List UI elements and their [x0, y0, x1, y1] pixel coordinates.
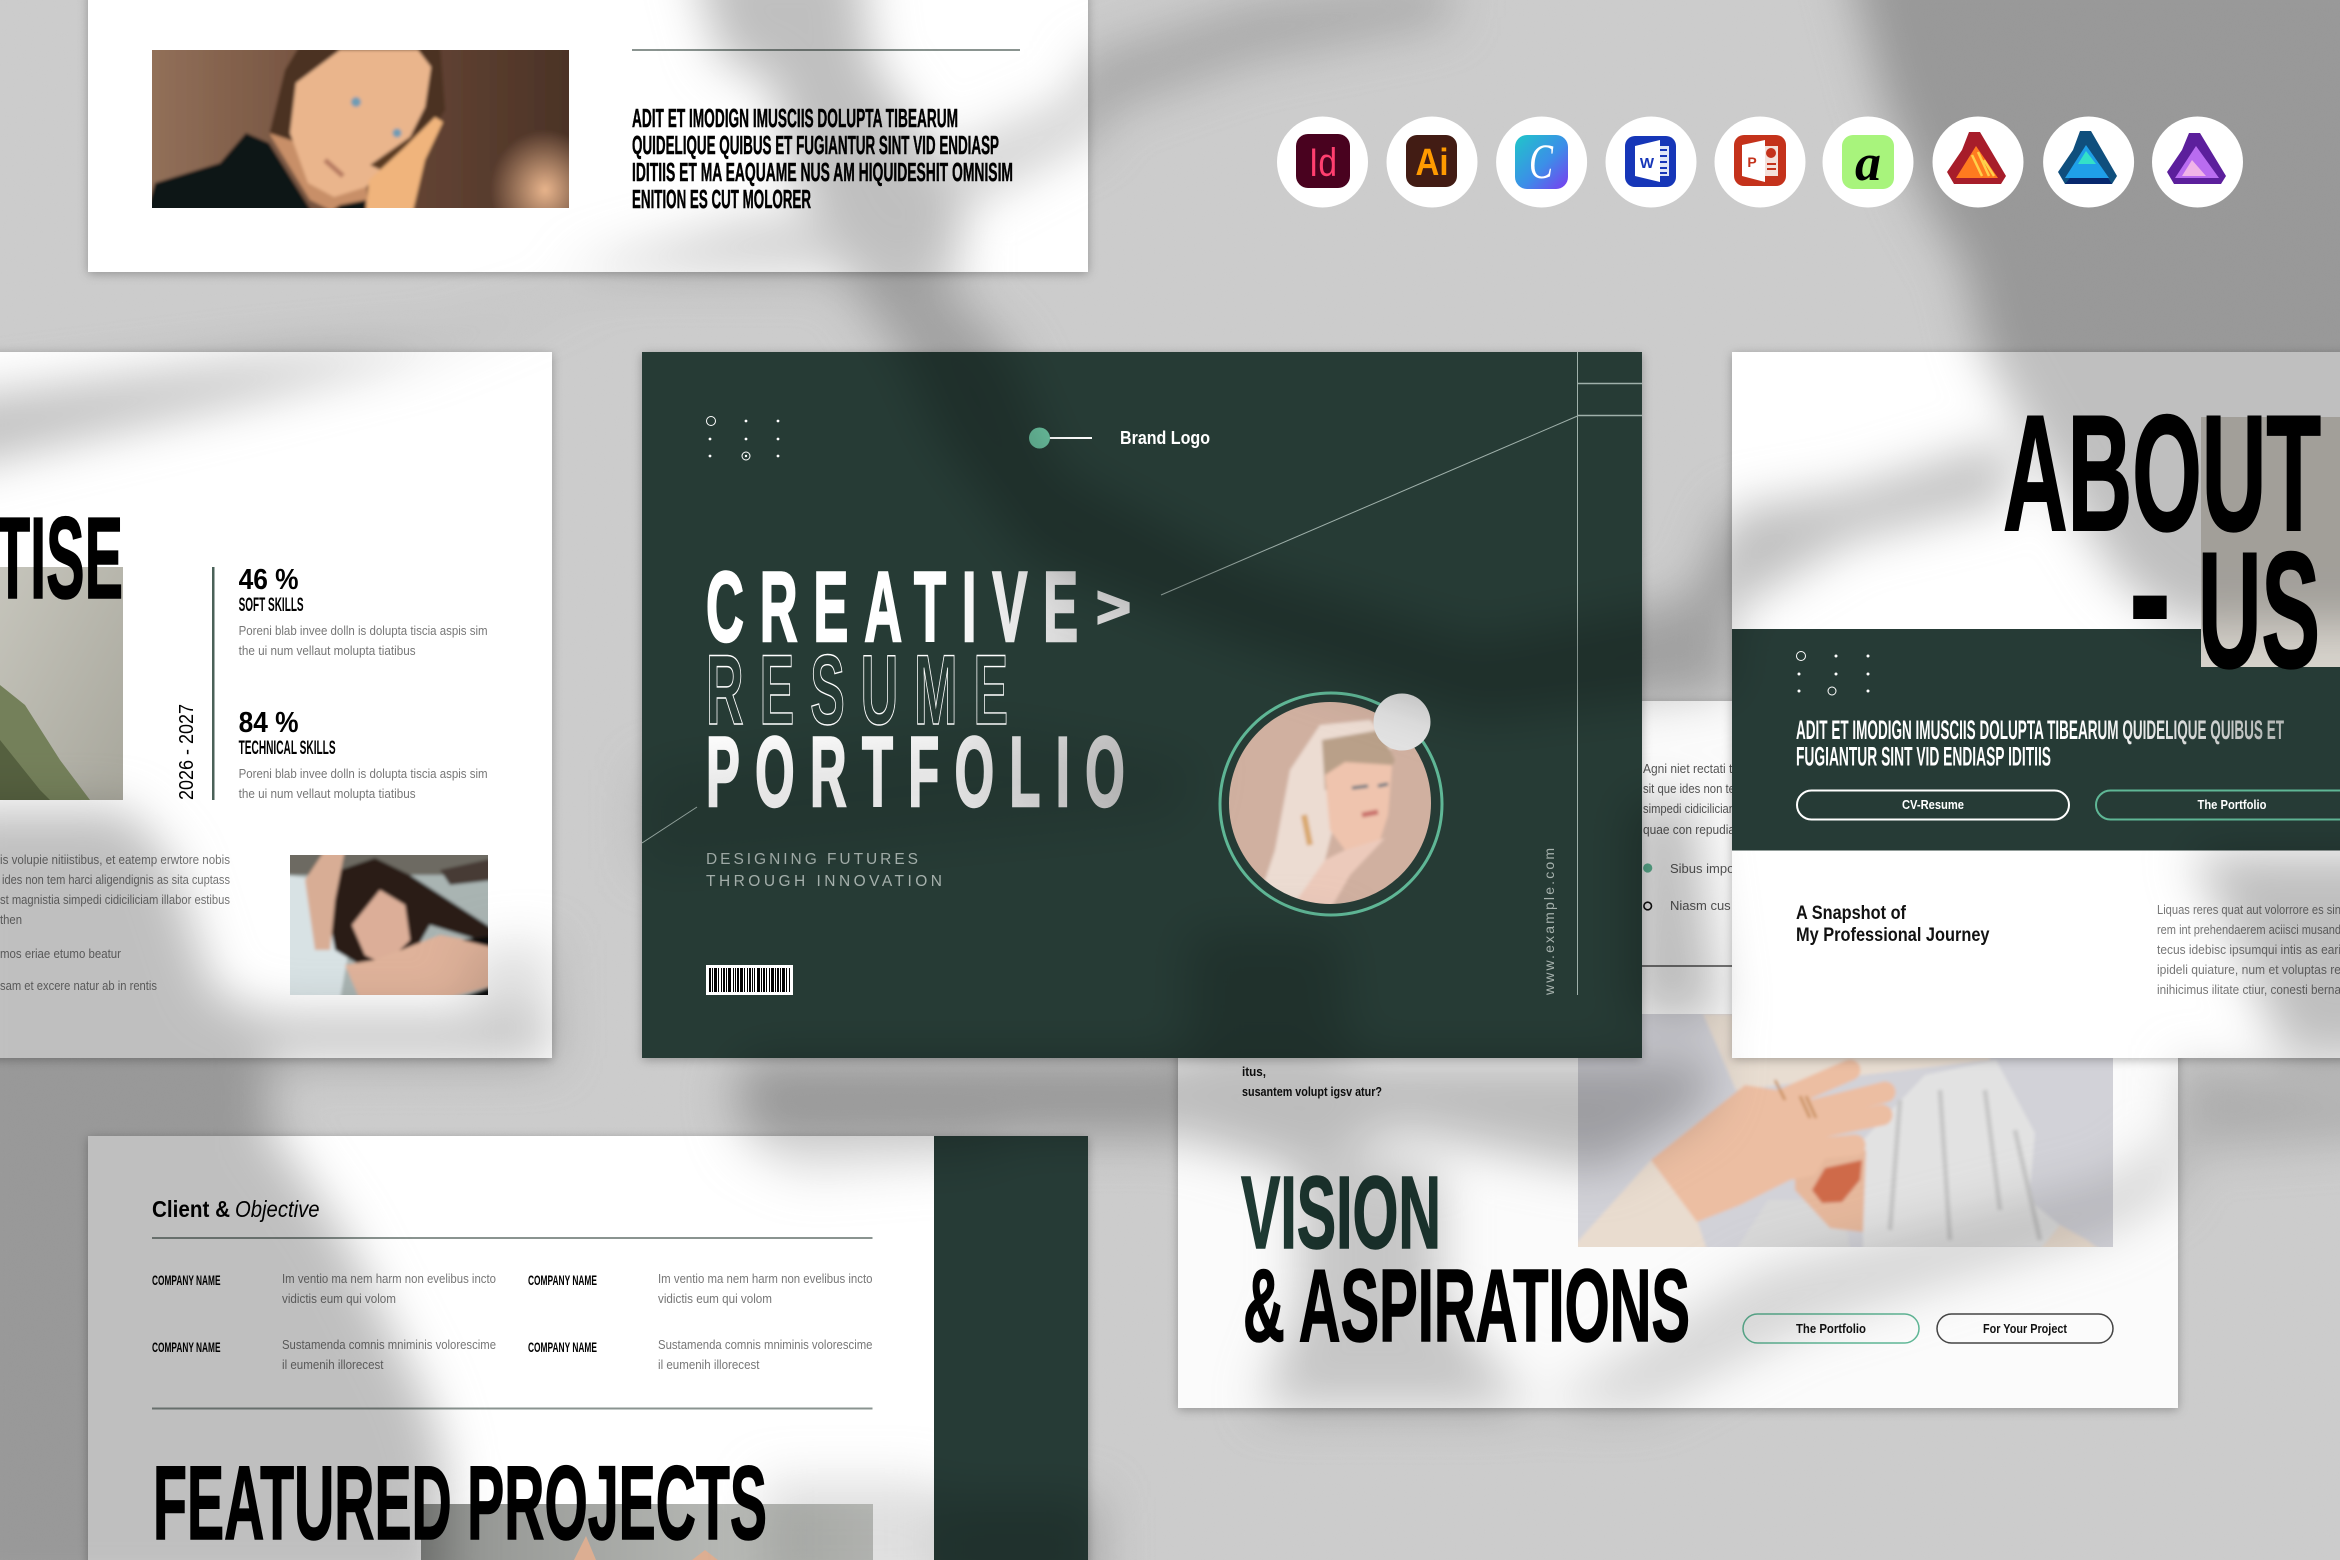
text block: partly hidden intro: Agni niet rectati ti: [1643, 761, 1735, 776]
button: the portfolio: [1743, 1314, 1919, 1343]
photo strip behind heading: [2201, 417, 2340, 667]
icon: InDesign: [1277, 116, 1368, 208]
text block: lower paragraph: [0, 853, 230, 993]
text block: lower paragraph: is volupie nitiistibus, et eatemp erwtore nobis: [0, 853, 230, 867]
icon: green a: a: [1855, 135, 1881, 192]
client rows: vidictis eum qui volom: [658, 1292, 772, 1306]
client rows: Im ventio ma nem harm non evelibus incto: [282, 1272, 496, 1286]
button: cv resume: CV-Resume: [1902, 797, 1964, 812]
panel: top slide with portrait: [88, 0, 1088, 272]
icon: Affinity Designer: [2043, 116, 2134, 208]
heading: featured projects: FEATURED PROJECTS: [153, 1445, 767, 1560]
client rows: COMPANY NAME: [152, 1272, 220, 1288]
title: PORTFOLIO: [706, 716, 1140, 827]
client rows: COMPANY NAME: [152, 1339, 220, 1355]
text block: lower paragraph: ides non tem harci aligendignis as sita cuptass: [2, 873, 230, 887]
photo: freckled woman portrait: [152, 50, 569, 208]
heading: client and objective: Client &: [152, 1196, 230, 1222]
title: >: [1096, 575, 1131, 640]
panel: vision and aspirations slide: [1178, 701, 2178, 1408]
client rows: Sustamenda comnis mniminis volorescime: [658, 1338, 873, 1352]
title: [706, 551, 1140, 827]
icon: green a: [1822, 116, 1914, 208]
subheading: snapshot: [1796, 903, 1990, 946]
photo: blonde woman: [1229, 702, 1431, 904]
text block: about paragraph: [2157, 903, 2340, 997]
heading: about us: -: [2129, 492, 2171, 693]
bullet list: [1642, 861, 1741, 967]
text block: partly hidden intro: quae con repudia: [1643, 822, 1736, 837]
client rows: Im ventio ma nem harm non evelibus incto: [658, 1272, 873, 1286]
heading: vision and aspirations: [1241, 1155, 1690, 1363]
panel: expertise slide: TISE: [0, 493, 123, 623]
text block: partly hidden intro: [1643, 761, 1736, 837]
text block: condensed paragraph: QUIDELIQUE QUIBUS ET FUGIANTUR SINT VID ENDIASP: [632, 130, 999, 160]
text block: condensed paragraph: ADIT ET IMODIGN IMUSCIIS DOLUPTA TIBEARUM: [632, 103, 958, 133]
brand logo: [1029, 427, 1210, 448]
text block: lower paragraph: sam et excere natur ab in rentis: [0, 979, 157, 993]
website text: www.example.com: [1541, 848, 1557, 996]
stat: technical skills: [239, 707, 488, 801]
heading: client and objective: Objective: [235, 1196, 320, 1222]
small text: itus,: [1242, 1064, 1266, 1079]
small text: [1242, 1064, 1382, 1099]
stat: technical skills: 84 %: [239, 707, 299, 739]
subtitle: DESIGNING FUTURES: [706, 851, 918, 868]
photo: featured project: [421, 1504, 873, 1560]
portrait in ring: [1220, 693, 1442, 915]
button: the portfolio: [2096, 790, 2340, 820]
bullet list: Sibus impos: [1670, 861, 1741, 876]
stat: technical skills: TECHNICAL SKILLS: [239, 738, 336, 759]
text block: condensed paragraph: ENITION ES CUT MOLORER: [632, 184, 811, 214]
green band: [1732, 629, 2340, 850]
dot grid: [706, 416, 779, 460]
client rows: vidictis eum qui volom: [282, 1292, 396, 1306]
client rows: COMPANY NAME: [528, 1339, 597, 1355]
barcode: [706, 965, 793, 995]
client rows: Sustamenda comnis mniminis volorescime: [282, 1338, 496, 1352]
heading: vision and aspirations: VISION: [1241, 1155, 1441, 1270]
button: the portfolio: The Portfolio: [2198, 797, 2267, 812]
panel: about us slide: [1732, 352, 2340, 1058]
photo: woman lying on bed: [290, 855, 488, 995]
stat: soft skills: 46 %: [239, 564, 299, 596]
brand logo: Brand Logo: [1120, 427, 1210, 448]
subheading: snapshot: My Professional Journey: [1796, 925, 1990, 946]
bullet list: Niasm cus v: [1670, 898, 1741, 913]
icon: Affinity Publisher: [1932, 116, 2024, 208]
timeline with years: 2026 - 2027: [176, 704, 198, 800]
subtitle: THROUGH INNOVATION: [706, 873, 942, 890]
icon: Illustrator: [1386, 116, 1478, 208]
panel: expertise slide: [0, 352, 552, 1058]
text block: partly hidden intro: sit que ides non te: [1643, 781, 1735, 796]
photo: plant leaf: [0, 567, 123, 800]
button: the portfolio: The Portfolio: [1796, 1321, 1866, 1336]
stat: soft skills: [239, 564, 488, 658]
small text: susantem volupt igsv atur?: [1242, 1084, 1382, 1099]
icon: Canva: [1496, 116, 1587, 208]
title: CREATIVE: [706, 551, 1094, 662]
text block: condensed paragraph: IDITIIS ET MA EAQUAME NUS AM HIQUIDESHIT OMNISIM: [632, 157, 1013, 187]
photo: hand on hat with white hair: [1570, 1005, 2120, 1255]
button: for your project: For Your Project: [1983, 1321, 2068, 1336]
icon: Affinity Photo: [2152, 116, 2243, 208]
text block: condensed paragraph: [632, 103, 1013, 214]
stat: soft skills: SOFT SKILLS: [239, 595, 304, 616]
button: cv resume: [1797, 790, 2069, 820]
icon: Canva: C: [1529, 133, 1553, 189]
icon: PowerPoint: [1714, 116, 1806, 208]
subheading: snapshot: A Snapshot of: [1796, 903, 1907, 924]
heading: about us: [2003, 381, 2321, 702]
stat: soft skills: Poreni blab invee dolln is dolupta tiscia aspis sim: [239, 624, 488, 638]
title: RESUME: [706, 634, 1024, 745]
subtitle: [706, 851, 942, 890]
text block: lower paragraph: st magnistia simpedi cidiciliciam illabor estibus: [0, 893, 230, 907]
text block: band heading: [1796, 715, 2284, 772]
stat: technical skills: Poreni blab invee dolln is dolupta tiscia aspis sim: [239, 767, 488, 781]
icon: Word: W: [1640, 155, 1655, 172]
text block: partly hidden intro: simpedi cidicilician: [1643, 801, 1735, 816]
heading: vision and aspirations: & ASPIRATIONS: [1243, 1248, 1690, 1363]
text block: lower paragraph: then: [0, 913, 22, 927]
stat: technical skills: the ui num vellaut molupta tiatibus: [239, 787, 416, 801]
panel: client and objective slide: [88, 1136, 1088, 1560]
panel: green cover slide: [642, 352, 1642, 1058]
stat: soft skills: the ui num vellaut molupta tiatibus: [239, 644, 416, 658]
client rows: [152, 1272, 873, 1372]
client rows: COMPANY NAME: [528, 1272, 597, 1288]
heading: client and objective: [152, 1196, 320, 1222]
client rows: il eumenih illorecest: [658, 1358, 760, 1372]
icon: InDesign: Id: [1309, 141, 1337, 185]
icon: Illustrator: Ai: [1416, 142, 1448, 184]
text block: band heading: FUGIANTUR SINT VID ENDIASP IDITIIS: [1796, 742, 2051, 772]
green side bar: [934, 1136, 1088, 1560]
dot grid: [1796, 652, 1870, 695]
button: for your project: [1937, 1314, 2113, 1343]
icon: PowerPoint: P: [1747, 154, 1757, 170]
client rows: il eumenih illorecest: [282, 1358, 384, 1372]
text block: lower paragraph: mos eriae etumo beatur: [0, 947, 121, 961]
decorative frame lines: [642, 352, 1642, 995]
panel: app icons: [1277, 116, 2243, 208]
icon: Word: [1606, 116, 1696, 208]
